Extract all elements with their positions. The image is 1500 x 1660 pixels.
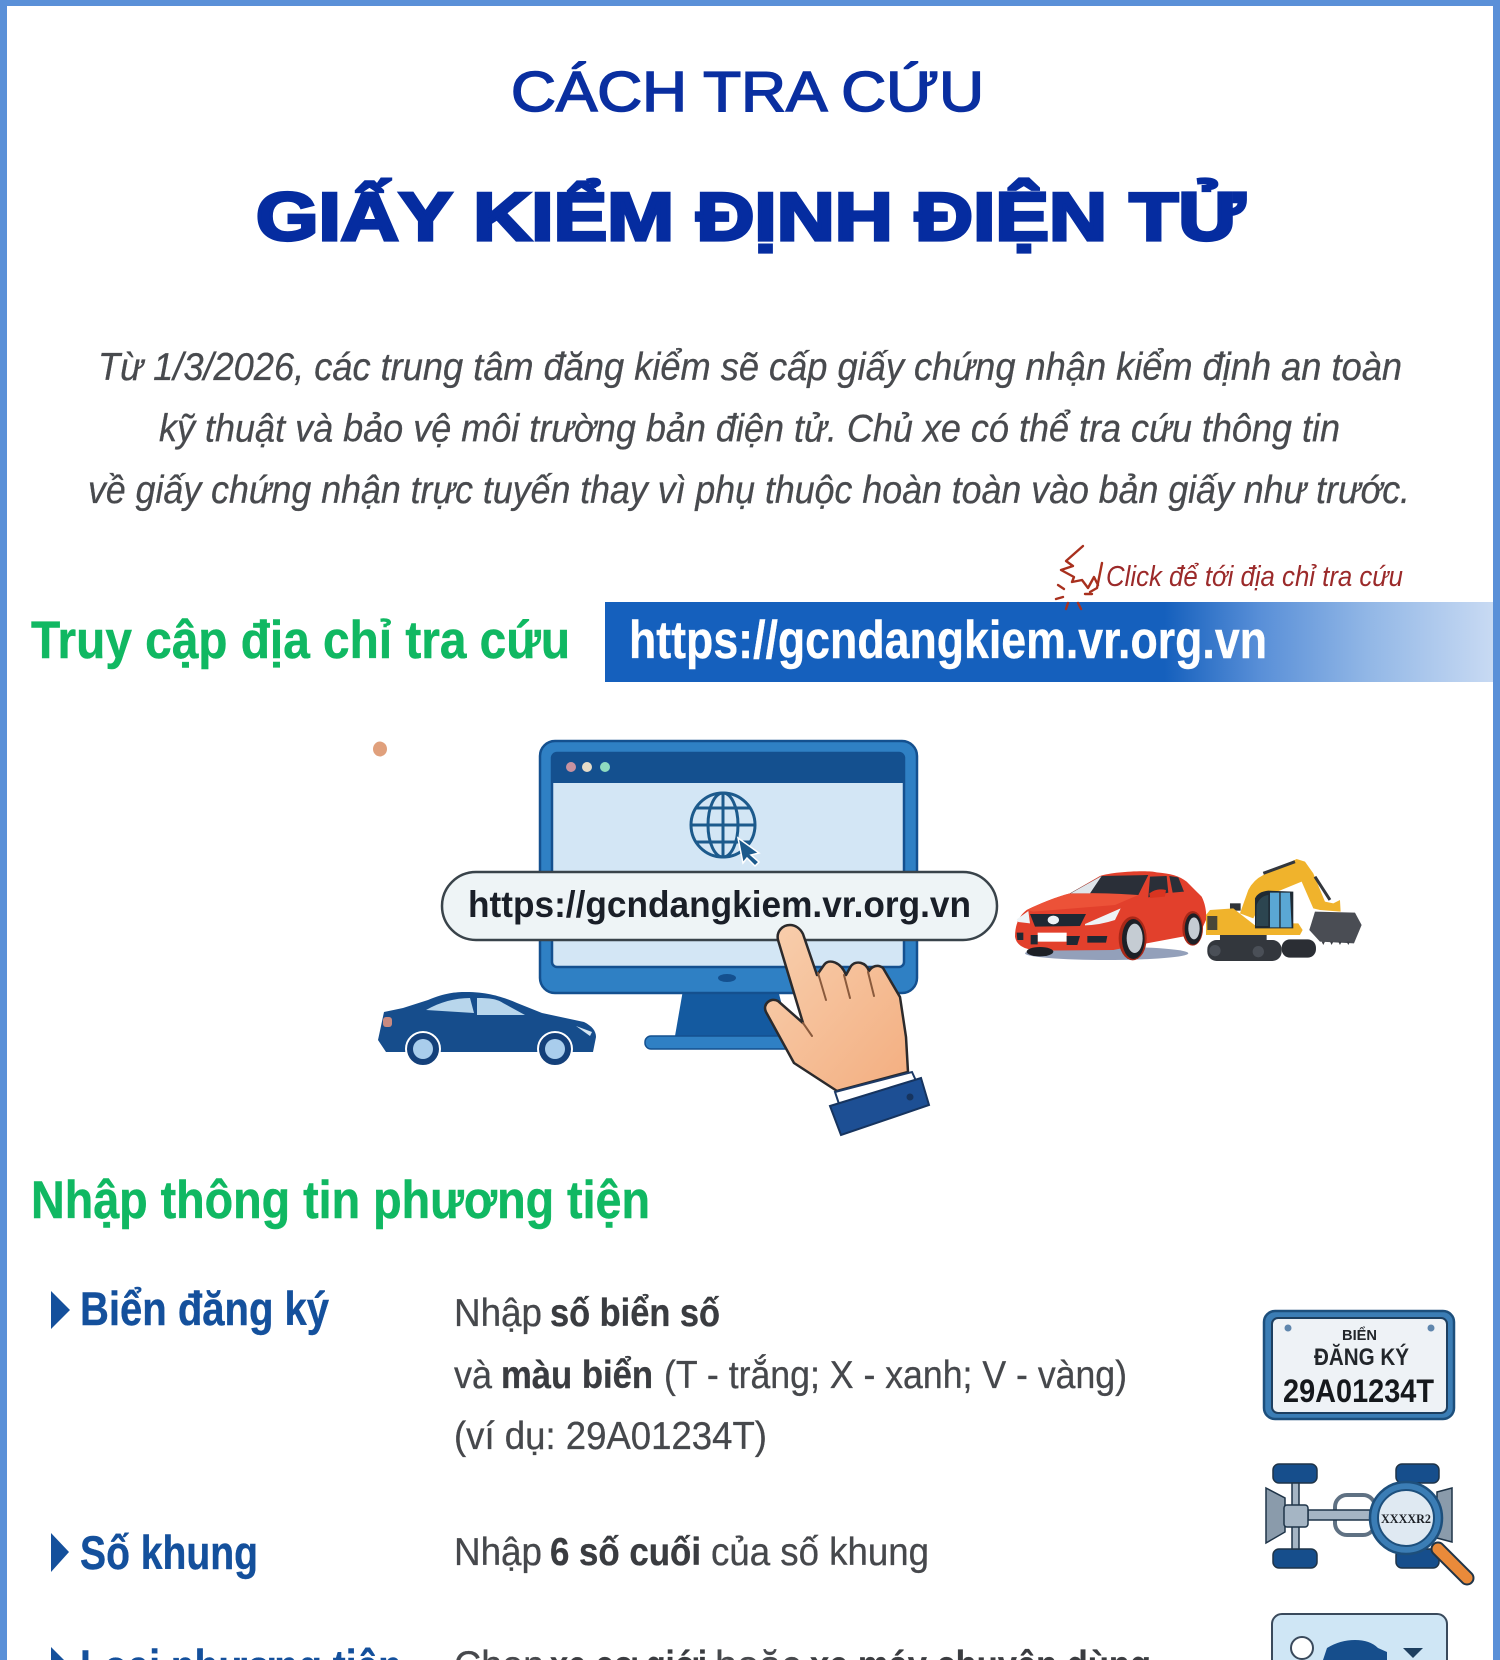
decorative dot — [373, 742, 387, 756]
icon: licence plate: 29A01234T — [1283, 1373, 1434, 1409]
click hint text: Click để tới địa chỉ tra cứu — [1106, 561, 1403, 593]
row description — [454, 1531, 929, 1574]
row: registration plate — [51, 1282, 1454, 1458]
icon: licence plate: ĐĂNG KÝ — [1314, 1343, 1409, 1371]
icon: pointing hand sketch — [1056, 546, 1102, 609]
url bar: https://gcndangkiem.vr.org.vn — [629, 611, 1267, 670]
icon: licence plate — [1264, 1311, 1454, 1419]
row description: (ví dụ: 29A01234T) — [454, 1415, 767, 1458]
icon: licence plate: BIỂN — [1342, 1326, 1377, 1344]
heading: enter vehicle information: Nhập thông tin phương tiện — [31, 1171, 650, 1230]
row description: 6 số cuối — [550, 1531, 701, 1574]
row: chassis number — [51, 1464, 1467, 1579]
icon: globe with cursor — [691, 793, 759, 866]
illustration: computer with address and vehicles — [373, 741, 1362, 1135]
icon: red car — [1015, 871, 1206, 960]
arrow marker — [51, 1291, 70, 1329]
title line 1: CÁCH TRA CỨU — [511, 60, 984, 124]
icon: chassis with magnifier — [1266, 1464, 1467, 1578]
intro text block: Từ 1/3/2026, các trung tâm đăng kiểm sẽ cấp giấy chứng nhận kiểm định an toàn — [98, 346, 1402, 389]
row description: của số khung — [711, 1531, 929, 1574]
icon: pointing hand — [765, 925, 929, 1135]
row description — [454, 1292, 1127, 1458]
title — [256, 60, 1246, 255]
row description — [454, 1644, 1151, 1660]
row description: màu biển — [501, 1354, 653, 1397]
address pill — [442, 872, 997, 940]
url bar — [605, 602, 1493, 682]
arrow marker — [51, 1533, 69, 1572]
heading: access address: Truy cập địa chỉ tra cứu — [31, 611, 570, 670]
row description: Nhập — [454, 1292, 542, 1335]
row description: Nhập — [454, 1531, 542, 1574]
icon: chassis with magnifier: XXXXR2 — [1381, 1511, 1431, 1526]
icon: blue car — [378, 992, 596, 1066]
intro text block: kỹ thuật và bảo vệ môi trường bản điện tử. Chủ xe có thể tra cứu thông tin — [159, 408, 1340, 450]
icon: excavator — [1206, 859, 1362, 961]
callout: click hint — [1056, 546, 1403, 609]
row description: (T - trắng; X - xanh; V - vàng) — [664, 1354, 1127, 1397]
icon: vehicle selector — [1272, 1614, 1447, 1660]
intro text block — [88, 346, 1410, 512]
intro text block: về giấy chứng nhận trực tuyến thay vì phụ thuộc hoàn toàn vào bản giấy như trước. — [88, 469, 1410, 512]
row: vehicle type — [51, 1614, 1447, 1660]
row label: Số khung — [80, 1526, 258, 1579]
row label: Biển đăng ký — [80, 1282, 329, 1335]
icon: monitor — [540, 741, 917, 1049]
address pill: https://gcndangkiem.vr.org.vn — [468, 884, 971, 925]
row description: và — [454, 1354, 492, 1397]
title line 2: GIẤY KIỂM ĐỊNH ĐIỆN TỬ — [256, 178, 1246, 255]
arrow marker — [51, 1647, 70, 1660]
row description: số biển số — [550, 1292, 720, 1335]
